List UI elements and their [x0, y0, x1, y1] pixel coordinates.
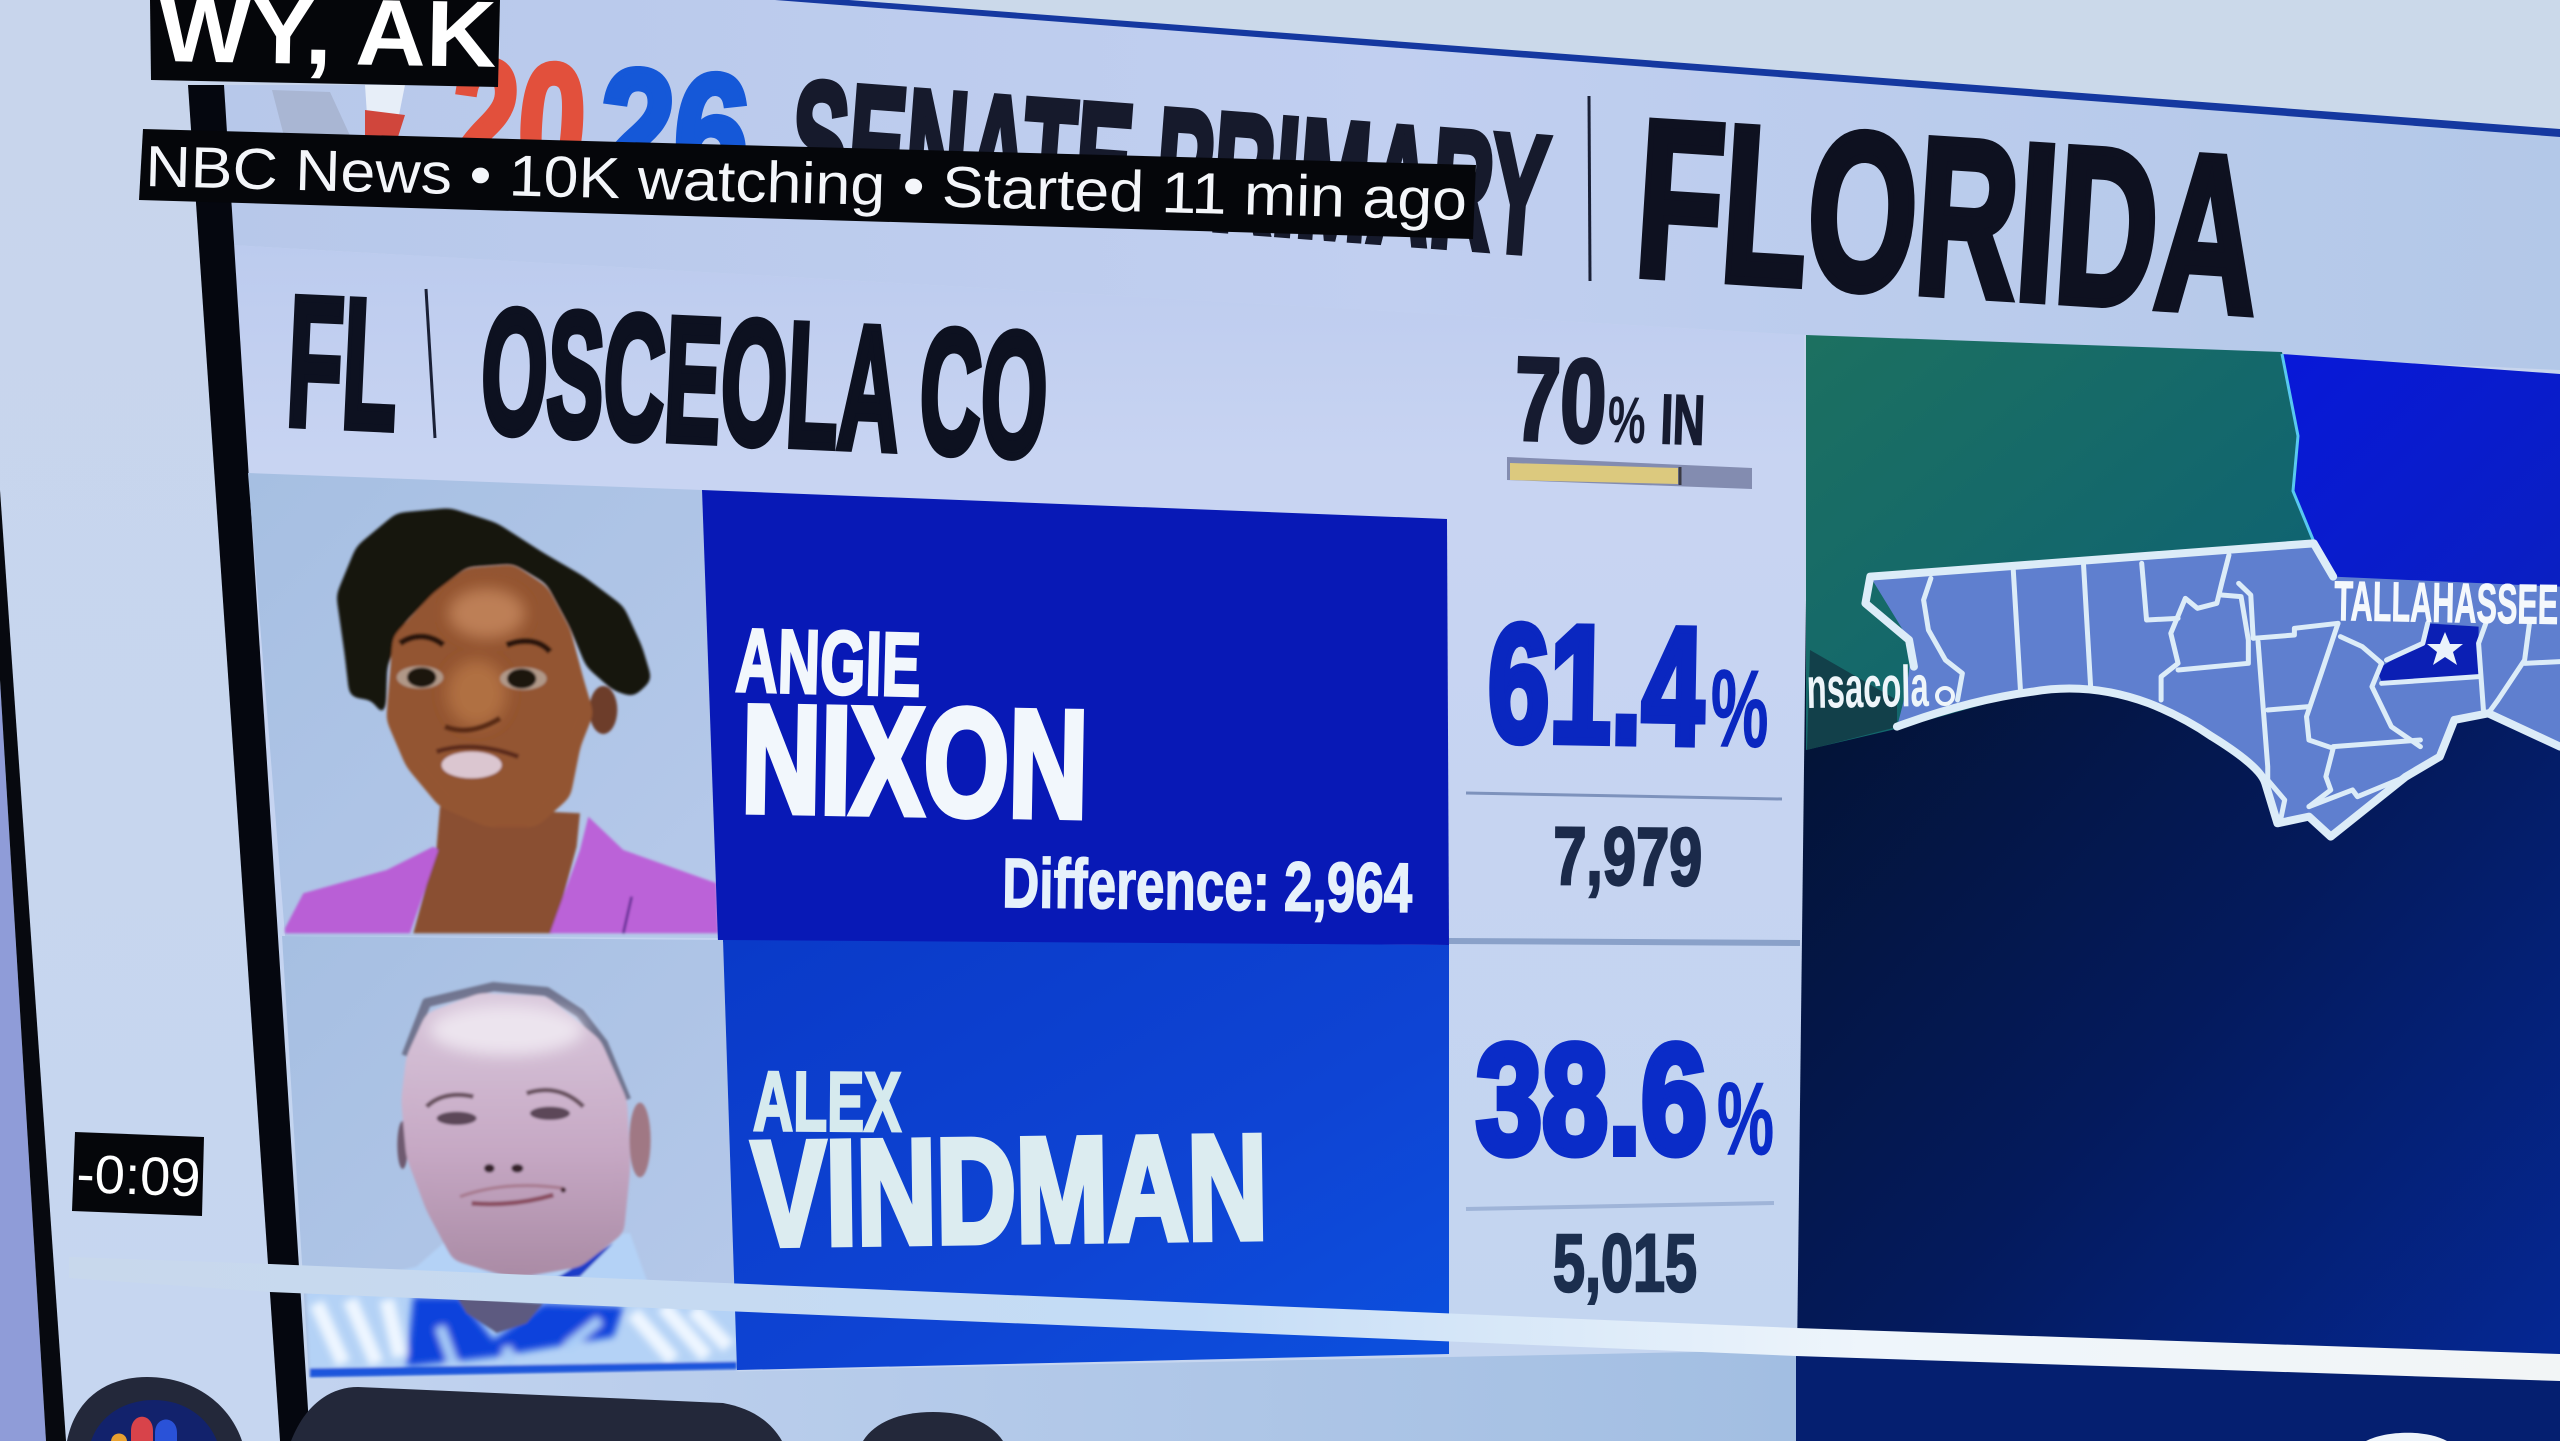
year 2026: 20: [446, 23, 591, 219]
Vindman share: 38.6: [1476, 1013, 1707, 1187]
caption: live status: NBC News • 10K watching • Started 11 min ago: [145, 134, 1468, 233]
first name: ANGIE: [734, 611, 922, 716]
city label: Pensacola: nsacola: [1806, 654, 1930, 721]
photo background: Nixon: [248, 473, 718, 938]
vote difference: Difference: 2,964: [1002, 844, 1413, 927]
percent reporting: [1507, 333, 1752, 489]
Nixon share: 61.4: [1486, 591, 1706, 780]
blue top rule: [775, 0, 2560, 137]
Nixon share: %: [1710, 647, 1770, 771]
capital star: [2427, 632, 2463, 665]
year 2026: 26: [593, 33, 755, 230]
logo: state shape and stripes: [272, 85, 405, 190]
Florida panhandle counties: [1865, 543, 2560, 837]
percent reporting: %: [1607, 382, 1647, 457]
senate primary text: SENATE PRIMARY: [784, 45, 1554, 290]
first name: ALEX: [753, 1054, 902, 1149]
Nixon votes: 7,979: [1553, 811, 1703, 903]
glow at bottom of map: [2366, 1433, 2447, 1441]
surname: NIXON: [740, 674, 1089, 850]
text: OSCEOLA CO: [477, 273, 1052, 495]
left edge purple strip: [0, 680, 46, 1441]
channel logo button: [67, 1377, 242, 1441]
screen bezel: [188, 85, 310, 1441]
Vindman share: %: [1717, 1061, 1774, 1176]
candidate bar: Nixon: [702, 490, 1449, 945]
photo background: Vindman: [282, 936, 737, 1377]
west coast terrain: [1807, 650, 1897, 750]
control pill button: [291, 1387, 782, 1441]
percent reporting: IN: [1659, 380, 1706, 460]
lower panel: [309, 1350, 1796, 1441]
lower map strip: [1796, 1340, 2560, 1441]
city marker: [1937, 688, 1953, 704]
main panel: [231, 245, 1804, 1340]
title: 2026 SENATE PRIMARY: [272, 23, 1554, 290]
county heading: FL: [283, 257, 402, 468]
results column: [1449, 591, 1800, 1309]
Vindman votes: 5,015: [1553, 1218, 1697, 1309]
left outer bezel: [0, 490, 66, 1441]
year 2026: [446, 23, 755, 230]
countdown timer: -0:09: [76, 1144, 202, 1208]
Alabama region: [1806, 335, 2316, 750]
map panel: [1796, 335, 2560, 1441]
portrait: Angie Nixon: [285, 508, 718, 933]
county heading: [283, 257, 1052, 495]
progress bar: [1507, 457, 1752, 489]
round control button: [863, 1412, 1003, 1441]
candidate bar: Vindman: [723, 940, 1449, 1370]
upper band above blue line: [849, 0, 2560, 133]
Georgia region: [2282, 354, 2560, 620]
header panel: [222, 0, 2560, 370]
surname: VINDMAN: [751, 1105, 1268, 1277]
portrait: Alex Vindman: [307, 987, 737, 1377]
white overlay stripe: [69, 1257, 2560, 1381]
peacock feathers: [111, 1417, 177, 1441]
water: [1796, 600, 2560, 1441]
percent reporting: 70: [1512, 333, 1609, 468]
title divider: [1589, 96, 1590, 281]
state boundary: [2282, 354, 2314, 542]
